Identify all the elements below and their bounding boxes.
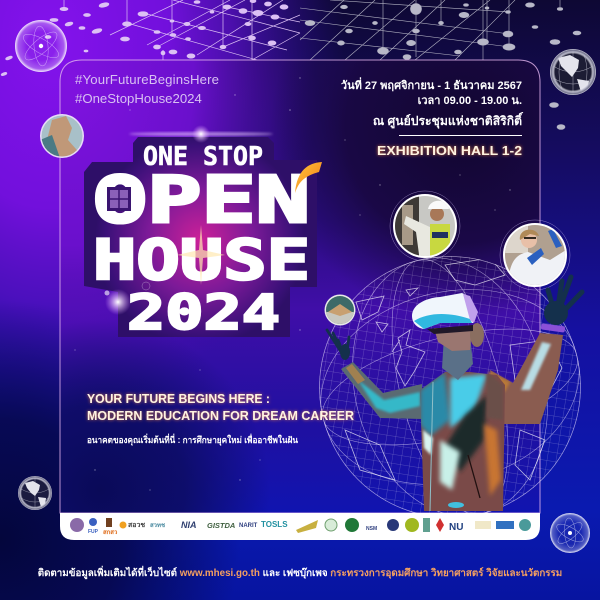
venue: ณ ศูนย์ประชุมแห่งชาติสิริกิติ์ [373,112,524,129]
left arm [341,362,422,419]
text: ONE STOP: ONE STOP [143,142,263,172]
neck and face [442,335,473,380]
Thai subheading: อนาคตของคุณเริ่มต้นที่นี่ : การศึกษายุคใหม่ เพื่ออาชีพในฝัน [87,433,299,446]
bubble: atom top left [15,20,67,72]
footer text: ติดตามข้อมูลเพิ่มเติมได้ที่เว็บไซต์ www.mhesi.go.th และ เฟซบุ๊กเพจ กระทรวงการอุดมศึกษา วิทยาศาสตร์ วิจัยและนวัตกรรม [38,565,562,580]
logo group: TOSLS [261,520,288,529]
main panel [60,60,540,520]
text: OPEN: OPEN [93,164,310,238]
logo group: สอวช [128,522,145,529]
logo bar [60,513,540,540]
headphones [470,323,484,347]
logo group: FUP [88,529,99,535]
title logo: One Stop Open House 2024 [84,125,322,341]
event details [341,77,524,158]
theme headline: MODERN EDUCATION FOR DREAM CAREER [87,409,354,423]
logo group: NU [449,522,463,533]
headset [412,293,478,334]
globe wireframe [319,256,581,513]
dark backing [84,137,317,337]
logo group [88,518,531,536]
theme headline [87,392,354,423]
date: วันที่ 27 พฤศจิกายน - 1 ธันวาคม 2567 [341,77,522,92]
logo group: สวทช [150,522,165,529]
network grid decoration, top left [1,0,300,76]
photo: engineer [390,191,460,262]
bubble: globe top right [550,49,596,95]
logo group: NARIT [239,523,258,529]
photo: hands [324,294,356,326]
photo: student at left edge [40,113,84,158]
bubble: globe bottom left [18,476,52,510]
centre star [177,225,225,285]
top flare [129,125,273,143]
text: 2024: 2024 [127,285,280,341]
photo: scientist [500,220,570,290]
lower-left flare [104,282,150,315]
right glove [544,277,582,325]
window in letter O [107,187,131,211]
hashtags [75,72,219,106]
time: เวลา 09.00 - 19.00 น. [418,95,522,107]
hall: EXHIBITION HALL 1-2 [377,144,522,158]
VR person [327,277,582,512]
wristband [541,323,565,333]
logo group: สกสว [103,529,118,536]
bubble: atom bottom right [550,513,590,553]
hashtags: #YourFutureBeginsHere [75,72,219,87]
torso [418,370,508,512]
hashtags: #OneStopHouse2024 [75,91,202,106]
theme headline: YOUR FUTURE BEGINS HERE : [87,392,270,406]
flame on letter N [295,162,322,193]
text: HOUSE: HOUSE [93,228,310,292]
network grid decoration, top right [300,0,581,130]
left glove [327,330,350,360]
logo group: NSM [366,526,377,532]
logo group: NIA [181,520,196,530]
right arm [490,333,563,424]
logo group: GISTDA [207,521,235,530]
